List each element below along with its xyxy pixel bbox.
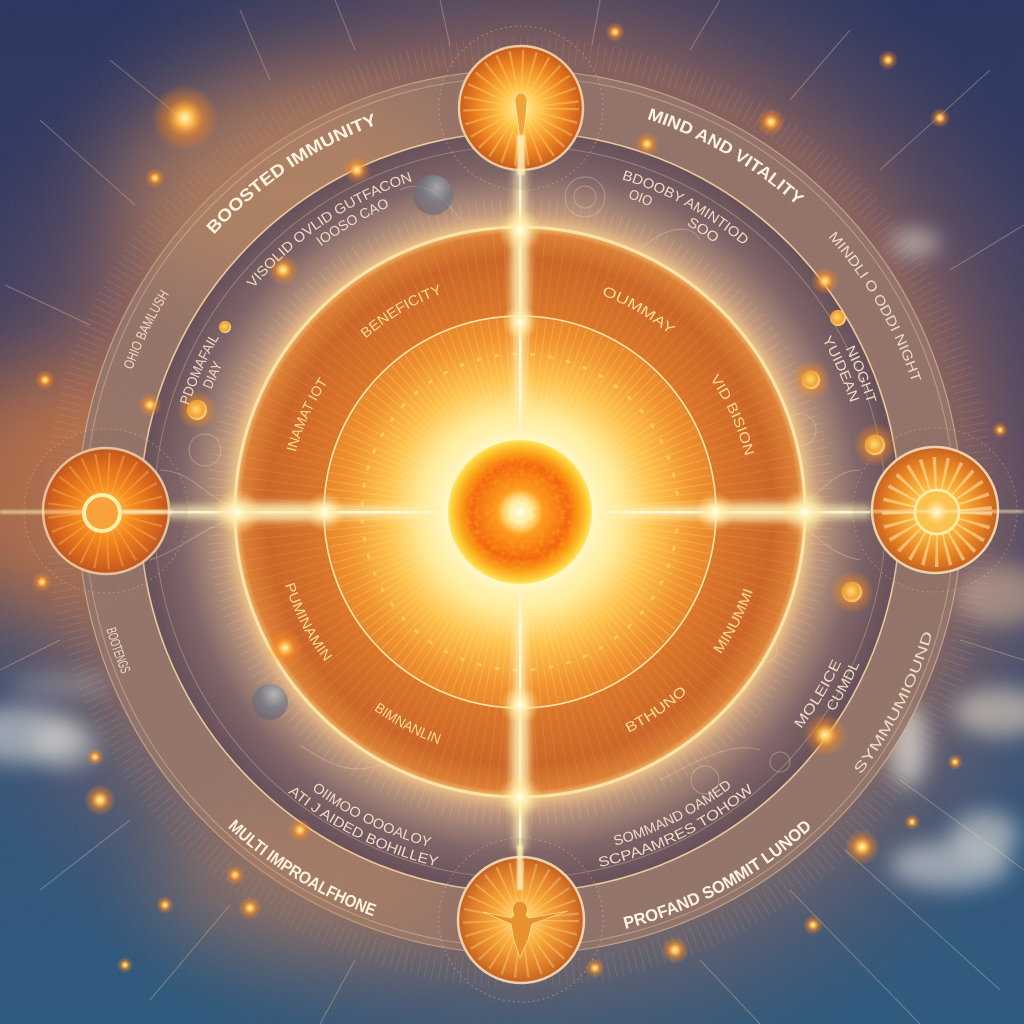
label: lower right body 1: SOMMAND OAMED	[614, 781, 730, 845]
inner sparkle ring	[362, 354, 678, 670]
right medallion orbit rings	[853, 428, 1017, 592]
label: lower right outer: PROFAND SOMMIT LUNOD	[623, 821, 810, 929]
left medallion orbit rings	[24, 429, 188, 593]
disc rays	[280, 272, 760, 752]
outer band second edge	[85, 77, 955, 947]
bottom medallion orbit rings	[439, 838, 603, 1002]
panel: outer label band	[78, 70, 962, 954]
label: upper right body 1: BDOOBY AMINTIOD	[622, 170, 748, 244]
label: lower right body 2: SCPAAMRES TOHOW	[599, 784, 752, 866]
ornaments in middle band	[150, 177, 860, 794]
clouds	[0, 231, 1024, 889]
outer band warm patch	[120, 80, 460, 300]
icon: figure with arms out	[483, 901, 568, 958]
sun core	[496, 488, 544, 536]
left beam	[0, 510, 85, 514]
disc label: lower right 1: BTHUNO	[625, 688, 685, 732]
inner disc body	[324, 316, 716, 708]
horizontal beam glow	[165, 506, 870, 518]
label: right lower body 1: MOLEICE	[794, 659, 842, 728]
label: left body 2: DIAY	[202, 360, 221, 389]
middle band thin line	[154, 146, 886, 878]
panel: inner yellow disc	[324, 316, 716, 708]
label: upper left body 1: VISOLID OVLID GUTFACON	[246, 172, 412, 286]
right beam	[870, 510, 1024, 513]
icon: glowing ring	[84, 495, 120, 531]
label: lower left body 2: ATI J AIDED BOHILLEY	[288, 788, 439, 866]
central sun	[448, 440, 592, 584]
panel: orange disc	[231, 223, 809, 801]
beam upper bloom	[510, 217, 530, 337]
label: upper right body 2: OIO	[630, 190, 652, 205]
label: left body 1: PDOMAFAIL	[180, 336, 219, 404]
label: right body 1: YUIDEAN	[824, 335, 860, 402]
outer band lower warm patch	[160, 810, 460, 950]
label: right lower body 2: CUMDL	[828, 664, 860, 710]
label: boosted immunity: BOOSTED IMMUNITY	[206, 113, 374, 234]
beam glow	[514, 150, 526, 850]
medallion: bottom with open-armed figure	[439, 838, 603, 1002]
side glow left	[0, 370, 170, 610]
bottom beam stem	[517, 845, 523, 890]
disc label: lower left 1: PUMINAMIN	[285, 582, 332, 662]
sun halo	[404, 396, 636, 628]
label: outer lower left: BOOTENGS	[106, 627, 130, 674]
medallion: top with standing figure	[439, 26, 603, 190]
horizontal beam core	[165, 511, 870, 513]
disc label: right: VID BISION	[712, 373, 754, 455]
disc label: upper left: BENEFICITY	[360, 284, 439, 338]
label: outer left: OHIO BAMLUSH	[124, 290, 169, 368]
right star core	[924, 499, 950, 525]
golden orbs	[187, 310, 885, 602]
disc label: lower left 2: BIMNANLIN	[374, 702, 441, 744]
top beam stem	[517, 135, 525, 175]
label: outer right: MINDLI O ODDI NIGHT	[828, 232, 922, 380]
top medallion orbit rings	[439, 26, 603, 190]
inner disc rays	[380, 372, 660, 652]
sun body	[448, 440, 592, 584]
medallion: right with starburst	[853, 428, 1024, 592]
disc label: upper right: OUMMAY	[604, 288, 676, 332]
panel: middle label band	[140, 132, 900, 892]
label: upper left body 2: IOOSO CAO	[316, 199, 388, 246]
disc body	[235, 227, 805, 797]
label: upper right body 3: SOO	[688, 218, 718, 241]
flare: vertical beam	[510, 150, 530, 850]
label: lower left outer: MULTI IMPROALFHONE	[228, 819, 377, 916]
label: lower left body 1: OIIMOO OOOALOY	[314, 784, 432, 846]
beam core	[519, 150, 521, 850]
disc outer glow	[231, 223, 809, 801]
icon: standing figure	[515, 93, 527, 147]
sun granulation	[462, 454, 578, 570]
beam lower bloom	[510, 690, 530, 810]
label: right body 2: NIOGHT	[846, 345, 876, 401]
small planets	[252, 175, 453, 720]
disc label: lower right 2: MINUMMI	[714, 588, 752, 654]
disc label: left: INAMAT IOT	[286, 376, 326, 452]
beam right bloom	[700, 502, 820, 522]
flare nodes on beams	[213, 208, 829, 819]
medallion: left with glowing ring	[0, 429, 188, 593]
left medallion inner beam	[122, 510, 172, 514]
middle band glow ticks	[217, 209, 823, 815]
flare: horizontal beam	[165, 502, 870, 522]
label: mind and vitality: MIND AND VITALITY	[648, 108, 804, 202]
label: right lower outer: SYMMUMIOUND	[855, 632, 931, 773]
beam left bloom	[220, 502, 340, 522]
icon: star ring	[915, 490, 959, 534]
